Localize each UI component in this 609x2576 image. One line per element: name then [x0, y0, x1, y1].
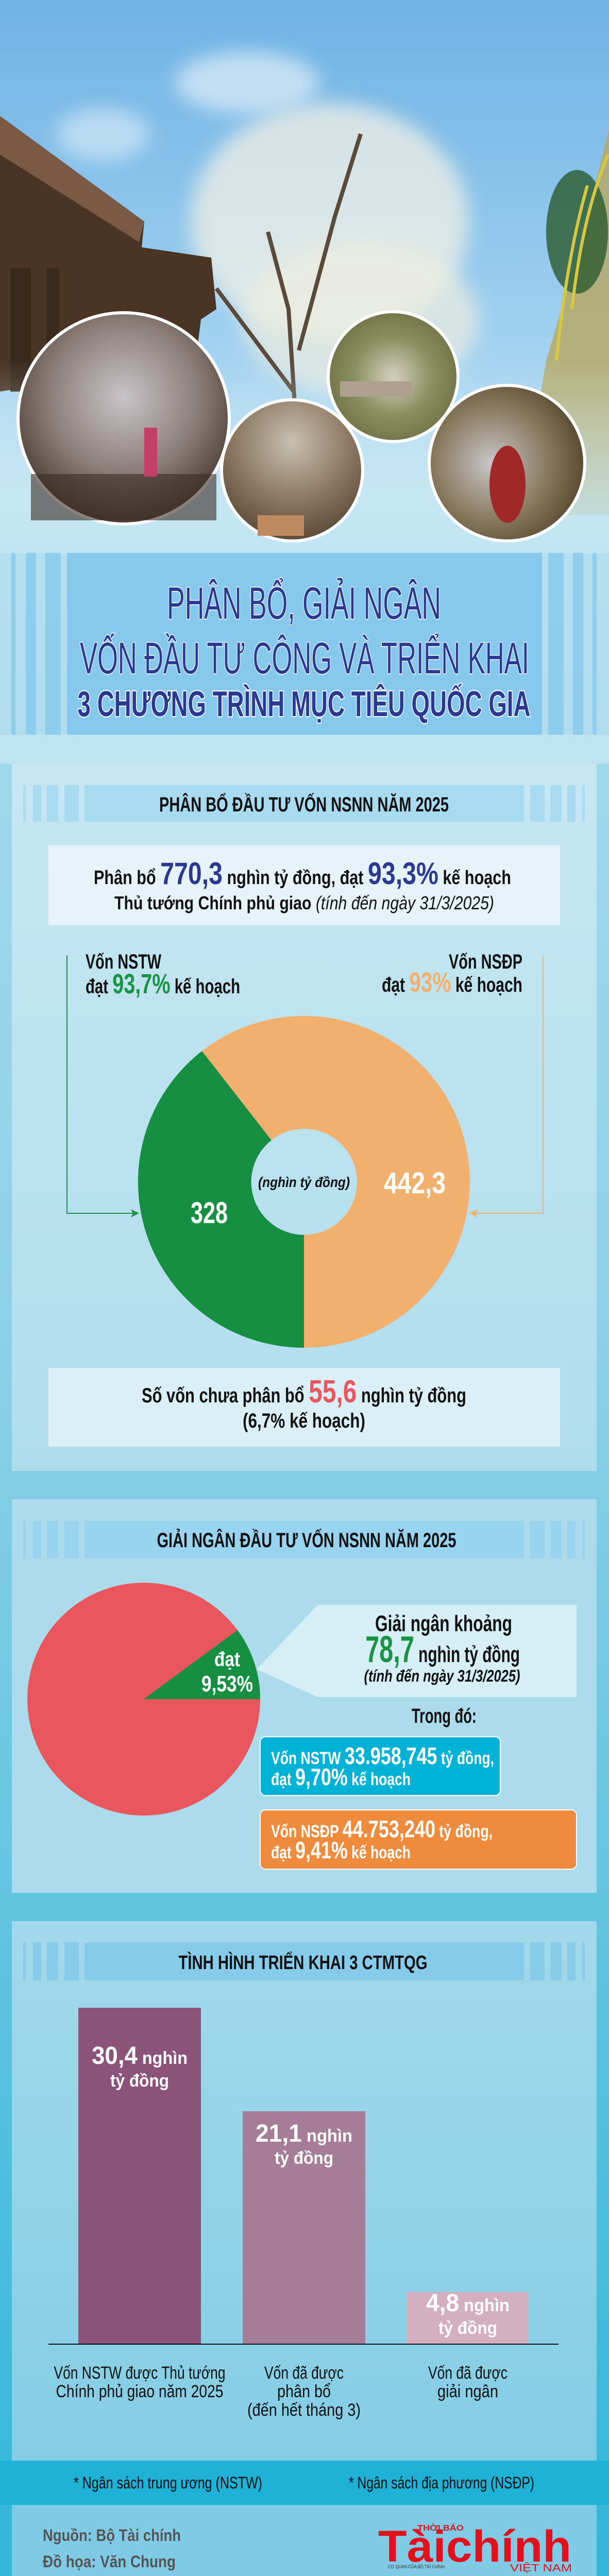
label: NSTW [86, 951, 240, 999]
bar chart: tỷ đồng [438, 2318, 497, 2338]
unallocated box: (6,7% kế hoạch) [243, 1410, 365, 1432]
donut chart: (nghìn tỷ đồng) [258, 1174, 350, 1190]
category labels: phân bổ [277, 2382, 331, 2401]
title stripes decoration [0, 553, 609, 738]
bar chart: 4,8 nghìn [426, 2290, 510, 2317]
bar chart: 21,1 nghìn [256, 2120, 352, 2147]
label: NSDP: Vốn NSĐP [449, 951, 522, 973]
label: of which: Trong đó: [412, 1705, 477, 1727]
category labels: Vốn đã được [264, 2363, 344, 2383]
credits [43, 2526, 181, 2571]
category labels: Vốn NSTW được Thủ tướng [54, 2363, 226, 2383]
credits: Nguồn: Bộ Tài chính [43, 2526, 181, 2545]
category labels: Chính phủ giao năm 2025 [56, 2382, 224, 2401]
logo: VIỆT NAM [510, 2562, 572, 2574]
donut chart [138, 1016, 470, 1348]
footnotes band: * Ngân sách trung ương (NSTW) [74, 2473, 262, 2492]
category labels: Vốn đã được [428, 2363, 508, 2383]
callout: (tính đến ngày 31/3/2025) [364, 1667, 520, 1685]
label: NSTW: Vốn NSTW [86, 951, 161, 973]
photo circle 3 [328, 312, 458, 442]
box: NSDP disbursed: đạt 9,41% kế hoạch [271, 1837, 411, 1863]
label: NSDP [382, 951, 522, 998]
box: NSTW disbursed: Vốn NSTW 33.958,745 tỷ đồng, [271, 1742, 494, 1769]
credits: Đồ họa: Văn Chung [43, 2552, 176, 2571]
donut chart: 328 [191, 1196, 228, 1230]
arrow: green [67, 955, 139, 1217]
bar chart: tỷ đồng [275, 2148, 333, 2168]
logo: Tàichính [378, 2522, 571, 2571]
photo circle 1 [18, 313, 229, 524]
title [67, 553, 542, 735]
logo: CƠ QUAN CỦA BỘ TÀI CHÍNH [388, 2564, 445, 2569]
pie chart: 9,53% [201, 1671, 253, 1697]
header: allocation: PHÂN BỔ ĐẦU TƯ VỐN NSNN NĂM 2025 [159, 792, 449, 816]
summary box [48, 845, 560, 925]
bar chart: tỷ đồng [110, 2071, 169, 2091]
panel: disbursement [12, 1499, 597, 1893]
category labels [54, 2363, 508, 2420]
unallocated box: Số vốn chưa phân bổ 55,6 nghìn tỷ đồng [142, 1374, 466, 1410]
header: disbursement: GIẢI NGÂN ĐẦU TƯ VỐN NSNN NĂM 2025 [157, 1528, 456, 1552]
footer panel [12, 2505, 597, 2576]
box: NSTW disbursed [260, 1737, 500, 1795]
footnotes band: * Ngân sách địa phương (NSĐP) [349, 2473, 534, 2492]
box: NSDP disbursed [260, 1810, 577, 1869]
panel: 3 programs [12, 1921, 597, 2461]
pie chart [27, 1583, 260, 1816]
photo circle 4 [429, 385, 585, 541]
footnotes band [0, 2461, 609, 2505]
logo: THỜI BÁO [417, 2523, 464, 2533]
pie chart: đạt [214, 1648, 240, 1671]
label: NSTW: đạt 93,7% kế hoạch [86, 969, 240, 999]
summary box: Thủ tướng Chính phủ giao (tính đến ngày 31/3/2025) [114, 892, 494, 913]
donut chart: 442,3 [384, 1166, 446, 1200]
arrow: orange [469, 955, 543, 1217]
callout: Giải ngân khoảng [375, 1611, 512, 1636]
photo circle 2 [222, 400, 363, 541]
bar chart [48, 2008, 559, 2344]
box: NSTW disbursed: đạt 9,70% kế hoạch [271, 1764, 411, 1790]
header: disbursement [23, 1521, 585, 1558]
category labels: giải ngân [437, 2382, 498, 2401]
panel: allocation [12, 764, 597, 1471]
label: NSDP: đạt 93% kế hoạch [382, 967, 522, 998]
callout [257, 1605, 577, 1697]
header: programs [23, 1942, 585, 1980]
callout: 78,7 nghìn tỷ đồng [365, 1629, 520, 1670]
box: NSDP disbursed: Vốn NSĐP 44.753,240 tỷ đồng, [271, 1816, 493, 1842]
category labels: (đến hết tháng 3) [247, 2400, 361, 2420]
header: programs: TÌNH HÌNH TRIỂN KHAI 3 CTMTQG [178, 1951, 428, 1974]
bar chart: 30,4 nghìn [92, 2042, 188, 2070]
unallocated box [48, 1368, 560, 1447]
summary box: Phân bổ 770,3 nghìn tỷ đồng, đạt 93,3% kế hoạch [94, 856, 511, 891]
header: allocation [23, 785, 585, 822]
hero photo [0, 0, 609, 554]
